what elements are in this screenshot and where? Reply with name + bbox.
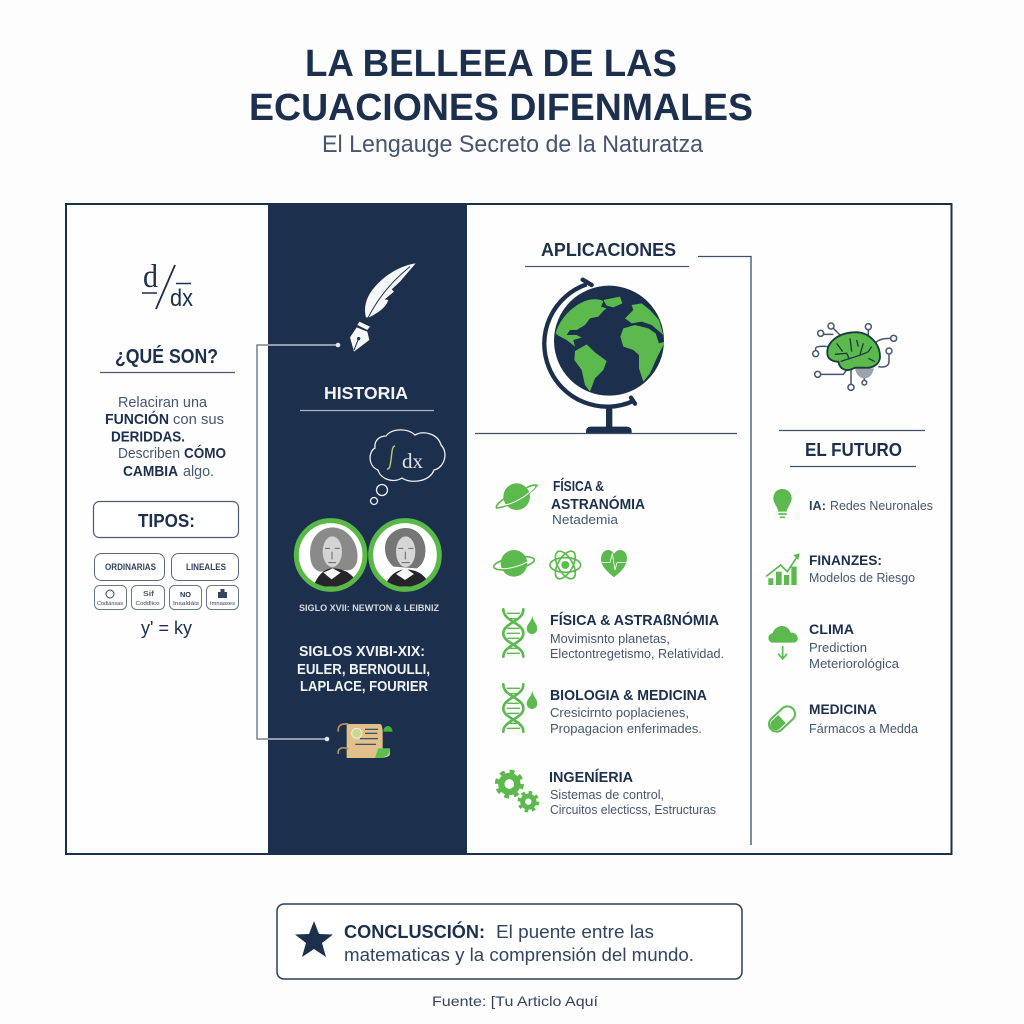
text: ingenieria: Sistemas de control, (550, 787, 664, 802)
chip: lineales: LINEALES (186, 562, 226, 572)
portrait: leibniz (371, 521, 439, 589)
text: definicion (105, 394, 226, 480)
text: fisica y astrabnomia: Electontregetismo, Relatividad. (550, 646, 724, 661)
box: tipos (94, 502, 238, 538)
text: definicion: CAMBIA (123, 463, 178, 480)
chip: cotidianas: Codiánsas (97, 601, 123, 607)
text: finanzas: FINANZES: (809, 552, 882, 568)
text: fisica y astronomia: FÍSICA & (553, 478, 604, 495)
text: fisica y astronomia: Netademia (552, 512, 619, 527)
text: medicina: Fármacos a Medda (809, 721, 919, 736)
text: ingenieria: Circuitos electicss, Estructuras (550, 802, 716, 817)
icon: brain (813, 323, 897, 390)
subtitle: El Lengauge Secreto de la Naturatza (322, 131, 704, 158)
chip: no lineales: NO (180, 590, 191, 599)
panel: historia (268, 204, 467, 854)
text: ia: IA: (809, 498, 826, 513)
portrait: newton (296, 521, 365, 589)
title: LA BELLEEA DE LAS (305, 43, 677, 85)
icon: d/dx: d (143, 259, 158, 295)
text: siglos xviii-xix: SIGLOS XVIBI-XIX: (299, 644, 425, 660)
text: biologia y medicina (550, 687, 707, 736)
text: fisica y astrabnomia: FÍSICA & ASTRAßNÓMIA (550, 611, 719, 629)
heading: aplicaciones: APLICACIONES (541, 240, 676, 260)
icon: cloud (768, 626, 798, 659)
divider bracket: futuro (698, 256, 751, 845)
icon: gears (497, 771, 538, 811)
text: siglos xviii-xix: LAPLACE, FOURIER (300, 679, 428, 695)
text: ia: Redes Neuronales (830, 498, 933, 513)
text: fisica y astrabnomia: Movimisnto planetas, (550, 631, 670, 646)
text: finanzas (809, 552, 915, 585)
text: siglos xviii-xix: EULER, BERNOULLI, (297, 662, 430, 678)
text: biologia y medicina: BIOLOGIA & MEDICINA (550, 687, 707, 704)
text: clima: Meteriorológica (809, 656, 900, 671)
icon: dna fisica (503, 609, 537, 657)
formula: y' = ky (141, 618, 192, 638)
heading: historia: HISTORIA (324, 383, 408, 403)
chip: ordinarias (94, 554, 164, 580)
text: ingenieria: INGENÍERIA (549, 769, 633, 786)
icon: light bulb (773, 489, 792, 517)
text: definicion: algo. (183, 463, 214, 480)
icon: scroll (338, 724, 393, 758)
chip: lineales (172, 554, 238, 580)
chip: cotidicos (132, 586, 164, 610)
icon: planet (496, 483, 537, 510)
chip: cotidicos: Coddlico (136, 601, 160, 607)
chip: lineares (206, 586, 238, 610)
icon: globe (544, 280, 665, 433)
icon: growth chart (767, 553, 800, 585)
icon: pill (766, 703, 798, 735)
icon: quill pen (350, 263, 416, 352)
text: clima: Prediction (809, 640, 867, 655)
icon: thought cloud (370, 430, 445, 504)
text: fisica y astronomia: ASTRANÓMIA (551, 495, 645, 513)
source: Fuente: [Tu Articlo Aquí (432, 993, 598, 1009)
text: conclusion: El puente entre las (496, 922, 654, 942)
text: conclusion: CONCLUSCIÓN: (344, 921, 485, 942)
text: definicion: FUNCIÓN (105, 410, 169, 428)
text: conclusion (344, 921, 694, 965)
text: fisica y astronomia (551, 478, 645, 527)
text: definicion: DERIDDAS. (111, 428, 185, 446)
callout: conclusion (277, 904, 742, 979)
text: fisica y astrabnomia (550, 611, 724, 661)
text: siglos xviii-xix (297, 644, 430, 695)
panel: aplicaciones (475, 240, 737, 817)
text: medicina (809, 701, 919, 736)
icon: d/dx (142, 259, 193, 312)
icon: dna biologia (503, 684, 537, 732)
title (249, 43, 753, 129)
text: ingenieria (549, 769, 716, 817)
heading: el futuro: EL FUTURO (805, 440, 902, 460)
panel: que son (94, 259, 238, 638)
box: tipos: TIPOS: (138, 511, 195, 531)
heading: que son: ¿QUÉ SON? (115, 345, 218, 368)
text: conclusion: matematicas y la comprensión del mundo. (344, 945, 694, 965)
text: biologia y medicina: Propagacion enferimades. (550, 721, 702, 736)
chip: lineares: Imnaases (210, 601, 235, 607)
icon row: planet, atom, heart (493, 548, 627, 582)
caption: newton y leibniz: SIGLO XVII: NEWTON & LEIBNIZ (299, 603, 439, 614)
text: clima: CLIMA (809, 621, 854, 637)
text: biologia y medicina: Cresicirnto poplacienes, (550, 705, 689, 720)
title: ECUACIONES DIFENMALES (249, 87, 753, 129)
text: clima (809, 621, 900, 671)
text: finanzas: Modelos de Riesgo (809, 570, 915, 585)
connector: historia timeline (257, 343, 340, 741)
text: medicina: MEDICINA (809, 701, 877, 717)
main frame (66, 204, 952, 854)
text: definicion: Describen (118, 445, 180, 462)
chip: no lineales: Insaldáis (173, 601, 199, 607)
icon: star (295, 921, 333, 957)
navy band (268, 204, 467, 854)
chip: cotidianas (94, 586, 126, 610)
chip: no lineales (170, 586, 202, 610)
icon: thought cloud: dx (402, 449, 424, 473)
panel: el futuro (766, 323, 933, 736)
icon: d/dx: dx (170, 285, 193, 312)
chip: ordinarias: ORDINARIAS (105, 562, 156, 572)
text: definicion: Relaciran una (118, 394, 208, 411)
text: definicion: con sus (173, 411, 224, 428)
chip: cotidicos: Sif (143, 591, 155, 598)
text: definicion: CÓMO (184, 444, 226, 462)
